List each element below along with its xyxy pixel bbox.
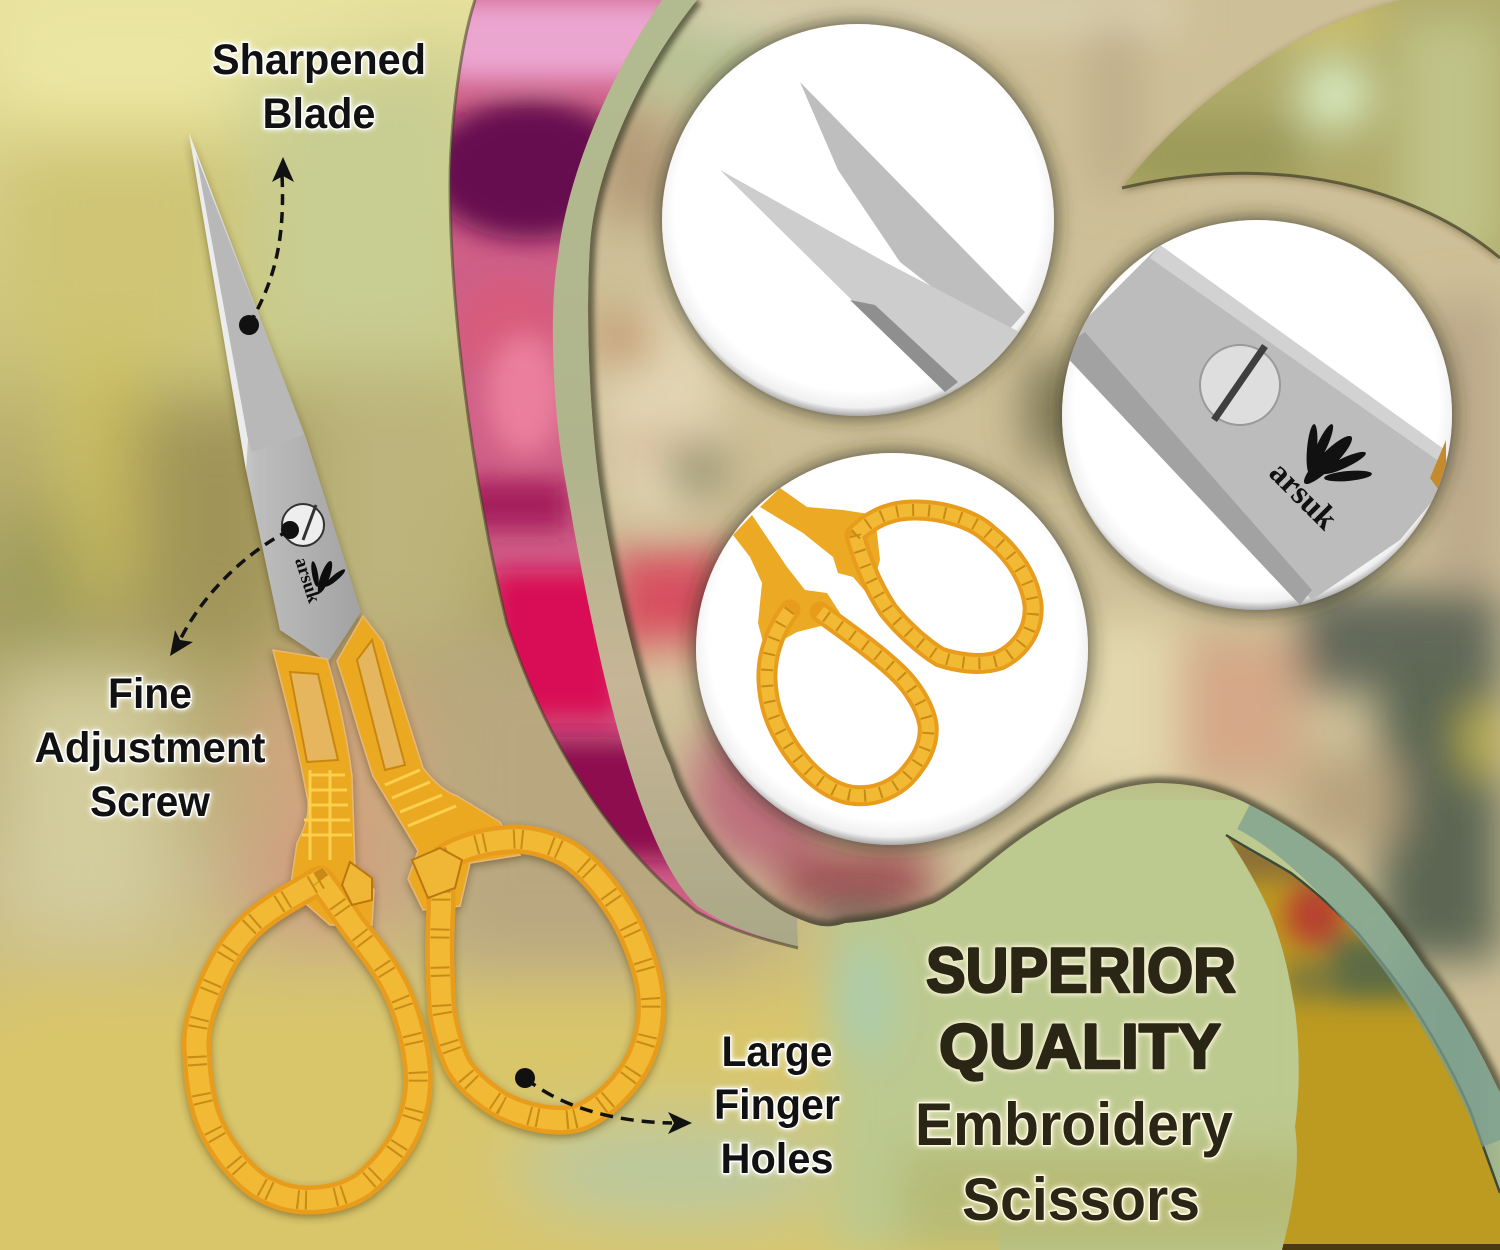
label: large finger holes: Finger <box>714 1081 840 1129</box>
label: fine adjustment screw: Fine <box>108 670 192 718</box>
circle: golden handles <box>696 453 1088 845</box>
label: sharpened blade: Blade <box>262 90 376 138</box>
headline: Scissors <box>962 1166 1200 1233</box>
handle panels <box>290 640 405 770</box>
pink crescent ribbon <box>450 0 792 946</box>
top right crescent <box>1120 0 1500 260</box>
headline: SUPERIOR <box>926 936 1236 1006</box>
label: large finger holes: Large <box>722 1028 832 1076</box>
headline <box>915 936 1236 1233</box>
logo text: arsuk <box>290 555 325 606</box>
right handle <box>337 616 651 1120</box>
logo leaf <box>310 559 347 595</box>
left handle <box>196 650 418 1200</box>
label: fine adjustment screw <box>34 670 266 826</box>
blurred scene behind circles <box>588 0 1500 1092</box>
bottom right crescent outline <box>1226 835 1500 1193</box>
label: large finger holes <box>714 1028 840 1183</box>
scissors <box>189 133 651 1200</box>
bottom right crescent <box>1220 830 1500 1250</box>
handle scrolls <box>342 848 462 905</box>
upper handle <box>760 488 1033 663</box>
dark shadow between circles <box>670 350 1074 941</box>
arrow: fine adjustment screw <box>170 521 299 656</box>
headline: Embroidery <box>915 1091 1234 1158</box>
blade <box>189 133 361 662</box>
circle: blade tips <box>662 24 1054 416</box>
screw <box>282 504 324 546</box>
handle grid engraving <box>302 770 456 860</box>
arrow: large finger holes <box>515 1068 692 1134</box>
bottom right outer rim <box>1246 812 1500 1140</box>
bottom right green shape <box>830 780 1500 1250</box>
label: sharpened blade: Sharpened <box>212 36 426 84</box>
label: fine adjustment screw: Screw <box>90 778 211 826</box>
label: large finger holes: Holes <box>720 1135 834 1183</box>
sage curved band <box>553 0 798 948</box>
circle: screw and logo <box>1060 220 1452 610</box>
logo text: arsuk <box>1262 455 1345 538</box>
label: sharpened blade <box>212 36 426 138</box>
pink ribbon outline shadow <box>450 0 798 948</box>
label: fine adjustment screw: Adjustment <box>34 724 266 772</box>
arrow: sharpened blade <box>239 157 294 335</box>
headline: QUALITY <box>939 1012 1221 1082</box>
logo leaf <box>1304 424 1372 484</box>
inner edge shadow <box>588 0 1500 1093</box>
lower handle <box>733 515 928 796</box>
